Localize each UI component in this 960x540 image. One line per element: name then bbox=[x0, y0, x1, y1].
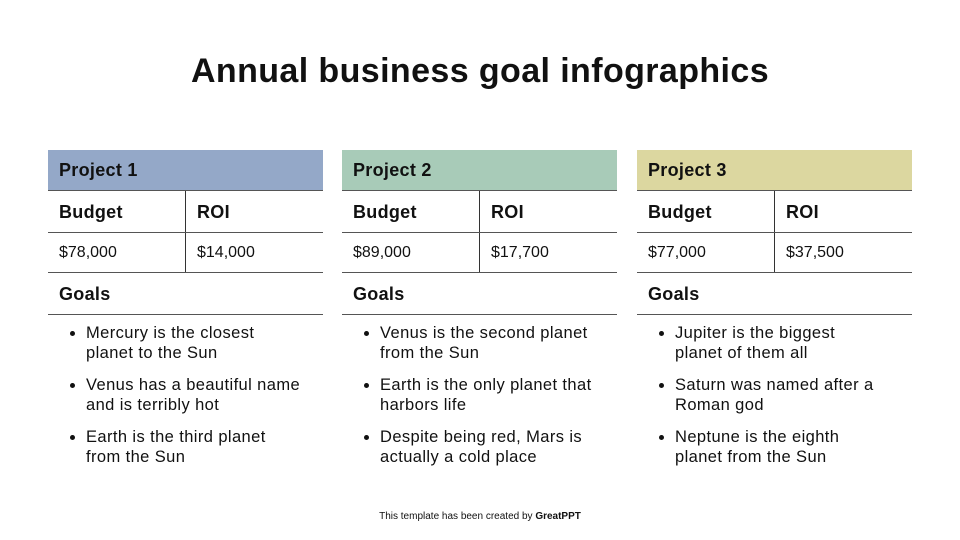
panel: project 1: Budget bbox=[59, 202, 123, 222]
panel: project 2: $17,700 bbox=[491, 244, 549, 261]
panel: project 1: $14,000 bbox=[197, 244, 255, 261]
panel: project 2: Venus is the second planet bbox=[380, 324, 588, 342]
panel: project 2: ROI bbox=[491, 202, 524, 222]
panel: project 3: Saturn was named after a bbox=[675, 376, 874, 394]
panel: project 3: Jupiter is the biggest bbox=[675, 324, 835, 342]
panel: project 1 bbox=[48, 150, 323, 466]
panel: project 2: Earth is the only planet that bbox=[380, 376, 592, 394]
panel: project 2: Goals bbox=[353, 284, 405, 304]
panel: project 2: actually a cold place bbox=[380, 448, 537, 466]
panel: project 1: and is terribly hot bbox=[86, 396, 219, 414]
panel: project 3: $37,500 bbox=[786, 244, 844, 261]
panel: project 2: $89,000 bbox=[353, 244, 411, 261]
panel: project 3: $77,000 bbox=[648, 244, 706, 261]
panel: project 2: Project 2 bbox=[353, 160, 432, 180]
panel: project 3: planet from the Sun bbox=[675, 448, 827, 466]
panel: project 1: from the Sun bbox=[86, 448, 185, 466]
panel: project 1: Earth is the third planet bbox=[86, 428, 266, 446]
panel: project 1: Goals bbox=[59, 284, 111, 304]
panel: project 2: Budget bbox=[353, 202, 417, 222]
panel: project 2: from the Sun bbox=[380, 344, 479, 362]
panel: project 1: planet to the Sun bbox=[86, 344, 218, 362]
panel: project 1: $78,000 bbox=[59, 244, 117, 261]
panel: project 3: planet of them all bbox=[675, 344, 808, 362]
panel: project 2 bbox=[342, 150, 617, 466]
title: Annual business goal infographics bbox=[191, 52, 769, 90]
panel: project 2: harbors life bbox=[380, 396, 466, 414]
panel: project 1: Project 1 bbox=[59, 160, 138, 180]
panel: project 1: Mercury is the closest bbox=[86, 324, 254, 342]
panel: project 3: Project 3 bbox=[648, 160, 727, 180]
panel: project 3: Neptune is the eighth bbox=[675, 428, 839, 446]
panel: project 1: Venus has a beautiful name bbox=[86, 376, 300, 394]
panel: project 3 bbox=[637, 150, 912, 466]
panel: project 1: ROI bbox=[197, 202, 230, 222]
footer: This template has been created by GreatPPT bbox=[379, 511, 581, 522]
panel: project 3: Roman god bbox=[675, 396, 764, 414]
panel: project 3: ROI bbox=[786, 202, 819, 222]
panel: project 3: Goals bbox=[648, 284, 700, 304]
panel: project 2: Despite being red, Mars is bbox=[380, 428, 582, 446]
panel: project 3: Budget bbox=[648, 202, 712, 222]
